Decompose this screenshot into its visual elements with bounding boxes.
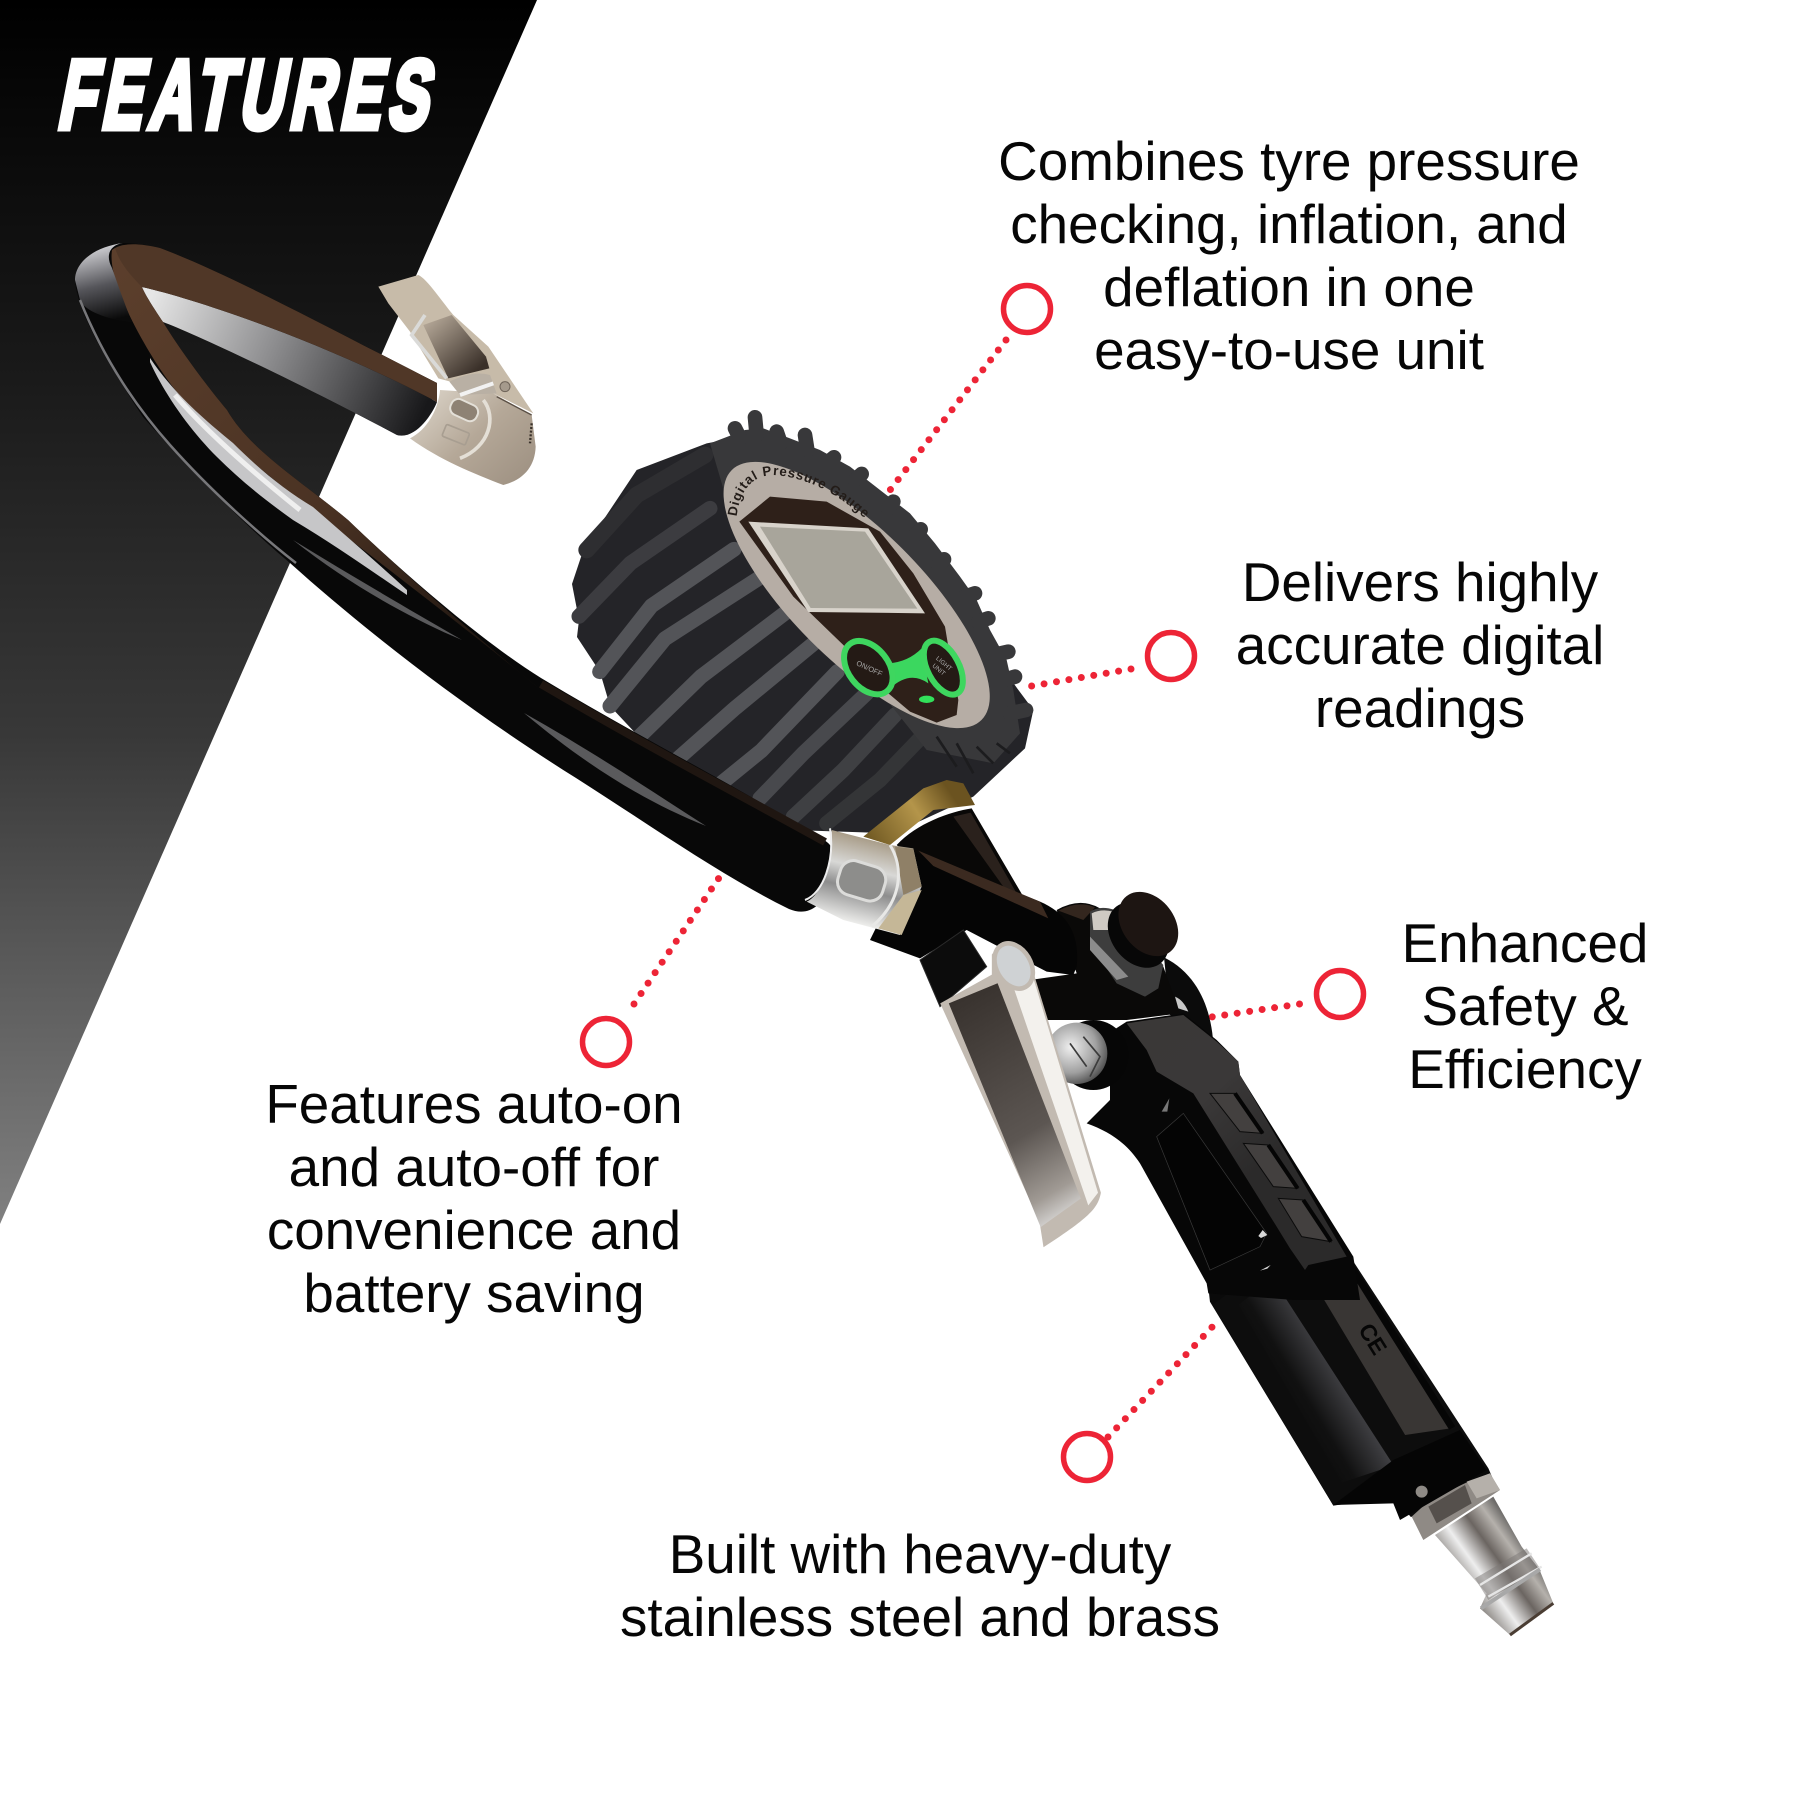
rear washer	[1164, 957, 1213, 1038]
grip ridge panels	[1210, 1093, 1331, 1242]
handle grey face	[1127, 1015, 1347, 1270]
trigger mount block	[920, 930, 987, 1007]
gun stem	[897, 808, 1047, 913]
gauge ring grooves	[937, 737, 1010, 773]
brass nut	[863, 780, 975, 845]
handle side recess	[1157, 1113, 1267, 1270]
feature text: safety: Efficiency	[1408, 1038, 1642, 1100]
chrome ball	[1058, 1020, 1128, 1090]
gloss spots	[1258, 1230, 1271, 1271]
feature text: safety: Safety &	[1421, 975, 1629, 1037]
dotted leader lines and ring markers	[582, 286, 1364, 1480]
feature text: top	[998, 130, 1580, 381]
hex nut	[1090, 908, 1163, 997]
opening shadow	[1333, 1430, 1487, 1520]
feature text: auto on/off	[265, 1073, 683, 1324]
feature text: top: Combines tyre pressure	[998, 130, 1580, 192]
feature text: top: deflation in one	[1103, 256, 1475, 318]
feature text: accuracy	[1236, 551, 1604, 739]
hose arm underside sheen	[142, 287, 437, 436]
diagonal gradient background panel	[0, 0, 537, 1224]
feature text: accuracy: accurate digital	[1236, 614, 1604, 676]
gauge label text	[737, 475, 877, 530]
knob, tube and trigger assembly	[805, 828, 1191, 1090]
feature text: top: checking, inflation, and	[1010, 193, 1568, 255]
green backlit buttons: ON/OFF	[855, 658, 884, 679]
chuck body	[410, 390, 536, 485]
lower grip panel	[1305, 1262, 1452, 1435]
feature text: safety: Enhanced	[1402, 912, 1648, 974]
hose grey apex sheen	[75, 243, 132, 322]
connector hex	[1412, 1473, 1500, 1540]
handle lower body	[1207, 1221, 1497, 1517]
feature text: auto on/off: convenience and	[267, 1199, 681, 1261]
feature text: auto on/off: Features auto-on	[265, 1073, 683, 1135]
connector plug	[1435, 1497, 1553, 1635]
feature text: auto on/off: battery saving	[303, 1262, 645, 1324]
feature text: safety	[1402, 912, 1648, 1100]
main tube	[870, 852, 1077, 975]
knob	[1095, 880, 1191, 980]
embossed CE mark: CE	[1353, 1318, 1392, 1359]
stem and brass nut	[863, 780, 1047, 913]
hose	[75, 243, 834, 912]
handle silhouette	[1087, 1013, 1360, 1300]
feature text: materials: Built with heavy-duty	[669, 1523, 1172, 1585]
hose brown reflection, arm	[115, 244, 437, 402]
gauge tooth ring	[710, 428, 1020, 763]
green backlit buttons: LIGHT	[934, 655, 953, 673]
gun handle upper section	[1087, 1013, 1360, 1300]
valve base	[1030, 903, 1180, 1020]
hose ferrule	[807, 830, 922, 935]
green backlit buttons	[834, 632, 971, 704]
gauge	[572, 410, 1034, 832]
gauge face	[686, 424, 1028, 766]
gauge LCD screen	[748, 522, 925, 613]
title: FEATURES	[52, 42, 450, 149]
feature text: auto on/off: and auto-off for	[289, 1136, 659, 1198]
trigger lever	[940, 937, 1101, 1247]
gauge dark plate	[739, 497, 958, 723]
gauge rubber ribs	[579, 455, 925, 823]
hose white highlight	[150, 358, 407, 595]
feature text: accuracy: readings	[1315, 677, 1525, 739]
chuck clip tab	[378, 275, 533, 413]
feature text: materials	[620, 1523, 1220, 1648]
gauge body	[572, 433, 1033, 833]
air connector	[1333, 1430, 1553, 1635]
gauge teeth	[735, 417, 1026, 713]
tyre chuck	[378, 275, 536, 485]
feature text: materials: stainless steel and brass	[620, 1586, 1220, 1648]
gun handle lower section	[1164, 957, 1497, 1517]
feature text: accuracy: Delivers highly	[1242, 551, 1599, 613]
green backlit buttons: UNIT	[931, 663, 946, 677]
hose brown reflection, lower branch	[112, 248, 541, 690]
gauge: Digital Pressure Gauge	[728, 466, 868, 517]
hose lower sheens	[293, 540, 462, 640]
feature text: top: easy-to-use unit	[1094, 319, 1484, 381]
